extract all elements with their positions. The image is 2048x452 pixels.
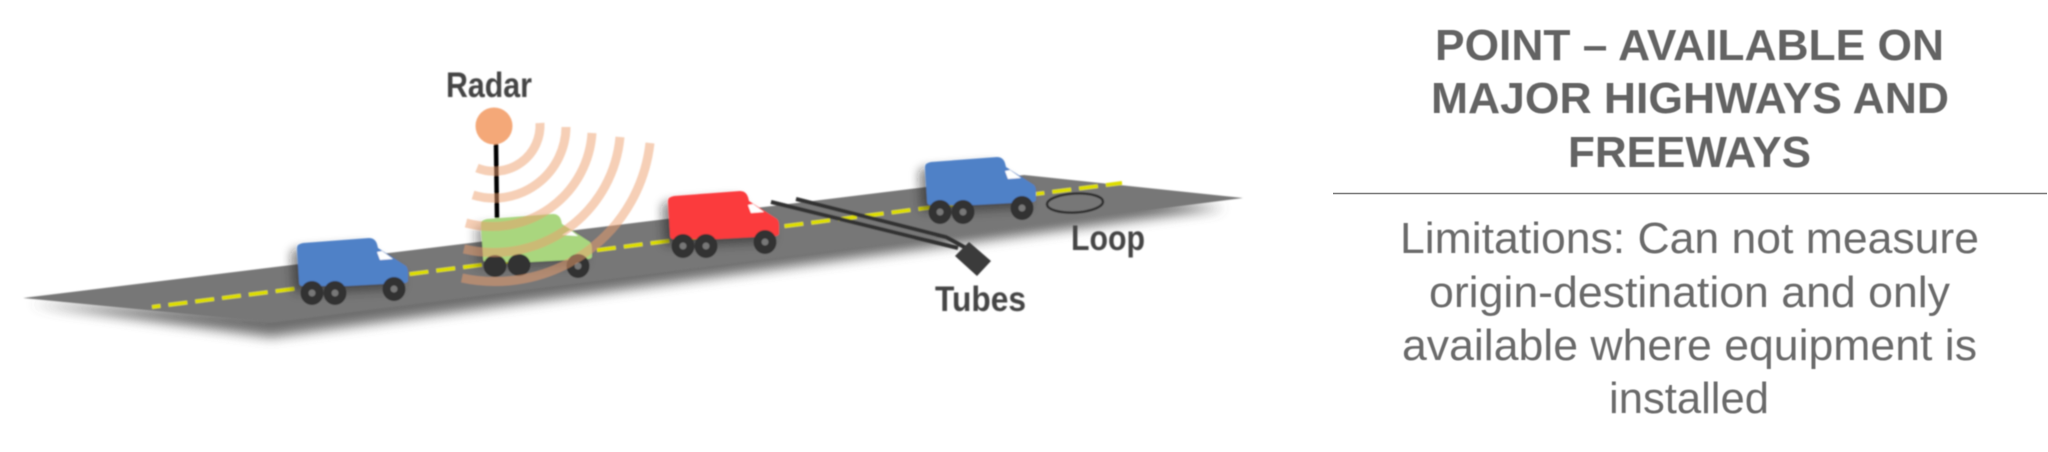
truck: blue right xyxy=(919,157,1036,224)
divider xyxy=(1333,192,2047,194)
road shadow xyxy=(30,195,1225,337)
illustration: road with sensors xyxy=(23,66,1243,337)
road centre dashed line xyxy=(152,183,1122,307)
heading: FREEWAYS xyxy=(1568,128,1811,177)
limitations text: available where equipment is xyxy=(1402,321,1977,370)
radar pole xyxy=(496,143,497,218)
truck: green xyxy=(475,214,592,278)
radar waves xyxy=(462,123,650,282)
label: Radar: Radar xyxy=(446,66,532,105)
truck: red xyxy=(662,191,779,258)
limitations text: origin-destination and only xyxy=(1429,268,1950,317)
heading: MAJOR HIGHWAYS AND xyxy=(1431,74,1949,123)
limitations text: Limitations: Can not measure xyxy=(1400,214,1979,263)
label: Tubes: Tubes xyxy=(935,280,1026,319)
radar head xyxy=(476,108,512,144)
road surface xyxy=(23,175,1243,322)
limitations text: installed xyxy=(1609,374,1769,423)
heading xyxy=(1431,21,1949,177)
limitations text xyxy=(1400,214,1979,423)
tubes sensor xyxy=(771,199,991,276)
label: Loop: Loop xyxy=(1071,219,1145,258)
heading: POINT – AVAILABLE ON xyxy=(1435,21,1944,70)
loop sensor xyxy=(1047,192,1103,214)
truck: blue left xyxy=(291,238,408,305)
